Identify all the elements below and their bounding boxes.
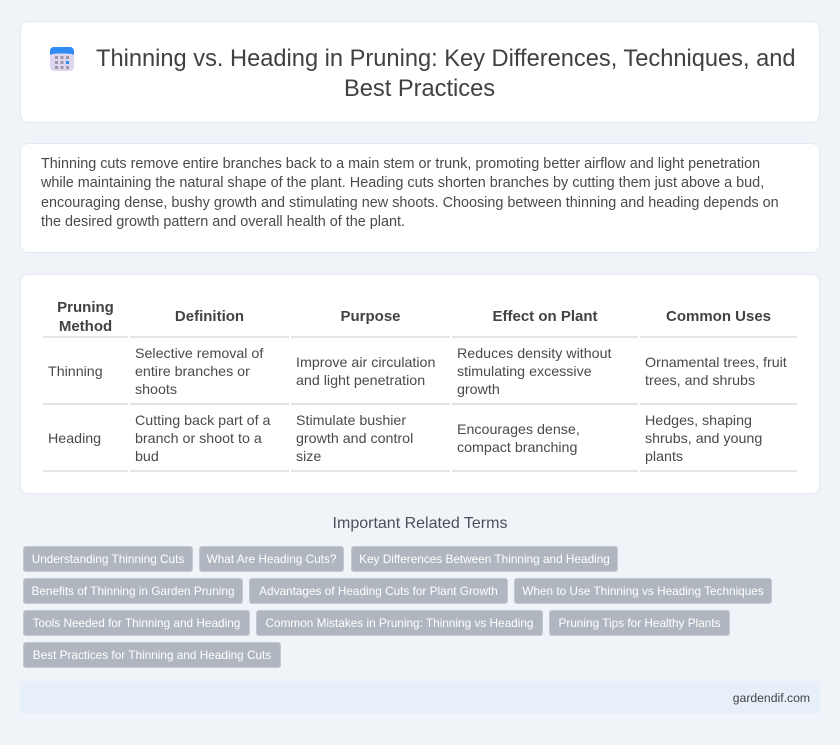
table header: Pruning — [57, 299, 114, 316]
row: Thinning: Improve air circulation — [296, 355, 435, 371]
related terms tags: Tools Needed for Thinning and Heading — [33, 616, 240, 630]
text block: description: the desired growth pattern and overall health of the plant. — [41, 214, 405, 230]
heading: title: Best Practices — [344, 76, 495, 102]
row: Thinning: growth — [457, 382, 500, 398]
row: Thinning: Ornamental trees, fruit — [645, 355, 787, 371]
row: Heading: Cutting back part of a — [135, 413, 270, 429]
row: Heading: compact branching — [457, 440, 577, 456]
related terms tags: Key Differences Between Thinning and Heading — [359, 552, 610, 566]
footer bar — [20, 681, 820, 714]
related terms tags: When to Use Thinning vs Heading Techniques — [522, 584, 764, 598]
row: Thinning: shoots — [135, 382, 177, 398]
table header: Definition — [175, 308, 244, 325]
related terms tags: Common Mistakes in Pruning: Thinning vs Heading — [266, 616, 533, 630]
row: Thinning: entire branches or — [135, 364, 250, 380]
row: Thinning: stimulating excessive — [457, 364, 592, 380]
panel: description card — [20, 143, 820, 253]
row: Heading: Heading — [48, 431, 101, 447]
row: Heading: size — [296, 449, 321, 465]
row: Thinning: Reduces density without — [457, 346, 611, 362]
related terms tags: Benefits of Thinning in Garden Pruning — [31, 584, 235, 598]
row: Heading: plants — [645, 449, 683, 465]
related terms tags: Understanding Thinning Cuts — [32, 552, 184, 566]
text block: description — [41, 156, 779, 230]
icon: calendar — [50, 47, 74, 71]
text block: description: while maintaining the natural shape of the plant. Heading cuts shorten branches by cutting them just above a bud, — [41, 175, 764, 191]
related terms tags — [23, 546, 772, 668]
related terms tags: What Are Heading Cuts? — [207, 552, 336, 566]
row: Heading — [48, 413, 762, 465]
table header: Method — [59, 318, 112, 335]
row: Heading: Stimulate bushier — [296, 413, 406, 429]
table header: Effect on Plant — [492, 308, 598, 325]
row: Heading: branch or shoot to a — [135, 431, 262, 447]
heading: title — [96, 46, 796, 102]
row: Heading: growth and control — [296, 431, 413, 447]
table header: Common Uses — [666, 308, 771, 325]
footer: site name: gardendif.com — [733, 691, 810, 705]
text block: description: Thinning cuts remove entire branches back to a main stem or trunk, promoting better airflow and light penetration — [41, 156, 760, 172]
table header: Purpose — [340, 308, 401, 325]
row: Thinning: Thinning — [48, 364, 103, 380]
row: Thinning: trees, and shrubs — [645, 373, 755, 389]
heading: important related terms: Important Related Terms — [333, 515, 507, 532]
row: Heading: Hedges, shaping — [645, 413, 752, 429]
row: Thinning: and light penetration — [296, 373, 425, 389]
panel: title card — [20, 21, 820, 123]
panel: comparison table card — [20, 274, 820, 494]
row: Heading: bud — [135, 449, 159, 465]
row: Heading: shrubs, and young — [645, 431, 762, 447]
table header — [57, 299, 771, 335]
related terms tags: Advantages of Heading Cuts for Plant Growth — [259, 584, 498, 598]
row: Thinning — [48, 346, 787, 398]
heading: title: Thinning vs. Heading in Pruning: Key Differences, Techniques, and — [96, 46, 796, 72]
related terms tags: Best Practices for Thinning and Heading Cuts — [33, 648, 271, 662]
text block: description: encouraging dense, bushy growth and stimulating new shoots. Choosing between thinning and heading depends on — [41, 195, 779, 211]
row: Thinning: Selective removal of — [135, 346, 263, 362]
row: Heading: Encourages dense, — [457, 422, 580, 438]
table: pruning comparison — [43, 299, 797, 472]
related terms tags: Pruning Tips for Healthy Plants — [559, 616, 720, 630]
